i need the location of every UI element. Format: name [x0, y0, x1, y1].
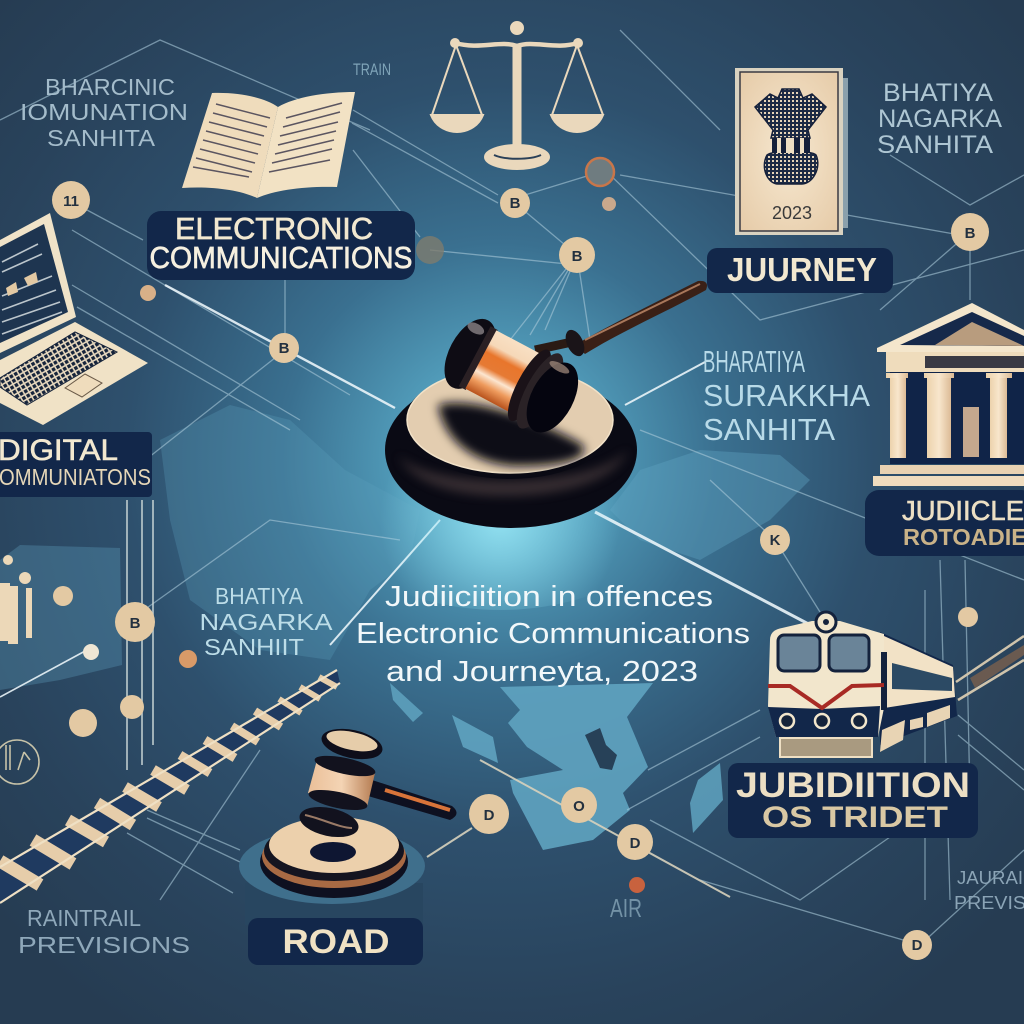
text: Bharatiya Surakkha Sanhita: SANHITA	[703, 412, 835, 447]
label: Journey: JUURNEY	[727, 251, 877, 288]
text: Bhatiya Nagarika Sanhita left: SANHIIT	[204, 634, 304, 660]
icon: emblem plaque 2023	[735, 68, 848, 235]
main title	[356, 581, 750, 688]
text: Bharatiya Communication Sanhita: BHARCINIC	[45, 74, 175, 100]
label: Judiciition of Trident: OS TRIDET	[762, 801, 948, 834]
label: Digital Communications	[0, 432, 152, 497]
text: Bharatiya Communication Sanhita: IOMUNATION	[20, 99, 188, 125]
text: Rain Rail Previsions: RAINTRAIL	[27, 905, 141, 931]
connector nodes: 11	[63, 193, 79, 210]
text: Bhatiya Nagarka Sanhita top right: NAGARKA	[878, 105, 1002, 133]
icon: railway track	[0, 670, 340, 903]
connector nodes: B	[279, 340, 290, 357]
connector nodes: B	[572, 248, 583, 265]
text: Bhatiya Nagarika Sanhita left	[200, 583, 333, 660]
text: Air: AIR	[610, 893, 642, 923]
main title: and Journeyta, 2023	[386, 656, 698, 688]
text: Bhatiya Nagarka Sanhita top right	[877, 79, 1002, 159]
connector nodes: B	[965, 225, 976, 242]
text: Bhatiya Nagarika Sanhita left: BHATIYA	[215, 583, 304, 609]
text: Bharatiya Surakkha Sanhita: SURAKKHA	[703, 378, 870, 413]
label: Judiciition of Trident: JUBIDIITION	[736, 766, 970, 805]
label: Judiciile Rotoadi	[865, 490, 1024, 556]
icon: train	[768, 612, 1024, 757]
icon: central gavel	[385, 281, 707, 528]
connector nodes	[52, 158, 989, 960]
main title: Judiiciition in offences	[385, 581, 713, 613]
label: Electronic Communications: COMMUNICATIONS	[150, 240, 412, 275]
label: Road	[248, 918, 423, 965]
text: Journey Previsions	[954, 868, 1024, 913]
icon: small bronze gavel	[239, 724, 457, 925]
label: Judiciition of Trident	[728, 763, 978, 838]
text: Bharatiya Surakkha Sanhita	[703, 344, 870, 447]
text: Rain Rail Previsions: PREVISIONS	[18, 932, 190, 958]
text: Bharatiya Communication Sanhita: SANHITA	[47, 125, 156, 151]
main title: Electronic Communications	[356, 618, 750, 650]
text: Train: TRAIN	[353, 60, 391, 79]
connector nodes: D	[484, 807, 495, 824]
label: Judiciile Rotoadi: ROTOADIE	[903, 524, 1024, 550]
text: Rain Rail Previsions	[18, 905, 190, 958]
bright light beams	[0, 285, 820, 897]
connector nodes: B	[510, 195, 521, 212]
connector nodes: B	[130, 615, 141, 632]
icon: laptop	[0, 213, 148, 425]
label: Electronic Communications	[147, 211, 415, 280]
text: Bhatiya Nagarika Sanhita left: NAGARKA	[200, 609, 333, 635]
text: Journey Previsions: JAURAI	[957, 868, 1023, 888]
icon: pillars left	[0, 555, 32, 644]
label: Electronic Communications: ELECTRONIC	[175, 211, 373, 246]
text: Bharatiya Communication Sanhita	[20, 74, 188, 151]
text: Bharatiya Surakkha Sanhita: BHARATIYA	[703, 344, 805, 379]
text: Bhatiya Nagarka Sanhita top right: BHATIYA	[883, 79, 993, 107]
connector nodes: D	[912, 937, 923, 954]
connector nodes: O	[573, 798, 585, 815]
map silhouettes	[0, 405, 810, 850]
glow behind gavel	[320, 390, 680, 610]
label: Road: ROAD	[282, 923, 390, 961]
connector nodes: D	[630, 835, 641, 852]
label: Digital Communications: DIGITAL	[0, 434, 118, 467]
label: Digital Communications: OMMUNIATONS	[0, 464, 151, 490]
icon: open book	[182, 92, 355, 198]
label: Journey	[707, 248, 893, 293]
icon: circle seal left	[0, 740, 39, 784]
icon: scales of justice	[431, 22, 603, 169]
text: Journey Previsions: PREVIS	[954, 893, 1024, 913]
connector nodes: K	[770, 532, 781, 549]
icon: emblem plaque 2023: 2023	[772, 203, 812, 223]
text: Bhatiya Nagarka Sanhita top right: SANHITA	[877, 131, 993, 159]
icon: court building	[873, 303, 1024, 486]
label: Judiciile Rotoadi: JUDIICLE	[902, 495, 1024, 526]
